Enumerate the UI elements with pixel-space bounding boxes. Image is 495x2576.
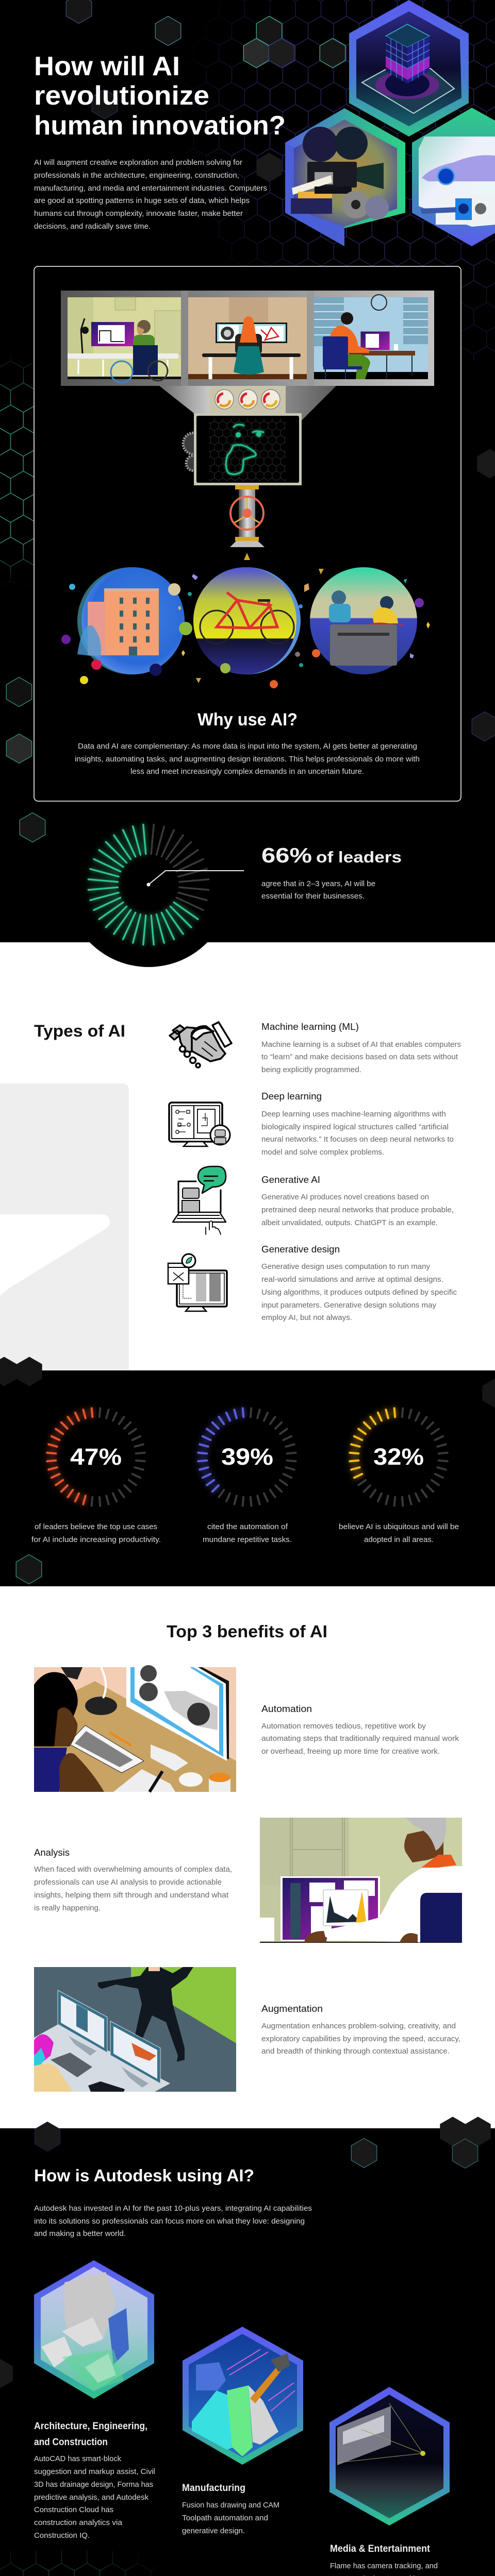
scene: bike designer [188, 297, 307, 379]
text: analysis [34, 1847, 232, 1912]
text: generative design: input parameters. Generative design solutions may [261, 1301, 437, 1310]
text: automation: automating steps that traditionally required manual work [261, 1735, 459, 1743]
gauge: 32 percent: 32% [373, 1444, 424, 1470]
text: automation: Automation removes tedious, repetitive work by [261, 1722, 426, 1731]
intro text: autodesk [34, 2205, 312, 2238]
text: architecture: predictive analysis, and Autodesk [34, 2494, 149, 2502]
text: manufacturing: Toolpath automation and [182, 2514, 268, 2522]
text: why use AI: Data and AI are complementary: As more data is input into the system, AI gets better at generating [78, 742, 417, 751]
scene: animator [314, 295, 428, 379]
hexagon: architecture [34, 2260, 154, 2399]
icon: deep learning monitor [169, 1103, 230, 1146]
intro text: decisions, and radically save time. [34, 223, 151, 231]
text: generative design: Generative design uses computation to run many [261, 1263, 431, 1271]
stat captions [31, 1523, 459, 1544]
text: deep learning: Deep learning [261, 1091, 322, 1101]
text: architecture: and Construction [34, 2437, 108, 2448]
intro text: autodesk: Autodesk has invested in AI for the past 10-plus years, integrating AI capabilities [34, 2205, 312, 2213]
icon: generative AI laptop [173, 1166, 226, 1234]
text: deep learning [261, 1091, 454, 1157]
text: augmentation: exploratory capabilities by improving the speed, accuracy, [261, 2035, 460, 2043]
text: generative AI: Generative AI produces novel creations based on [261, 1193, 429, 1201]
title: How will AI [34, 52, 180, 81]
intro text: manufacturing, and media and entertainment industries. Computers [34, 184, 267, 193]
text: manufacturing: Fusion has drawing and CAM [182, 2501, 279, 2510]
text: machine learning: being explicitly programmed. [261, 1066, 361, 1074]
text: architecture [34, 2421, 155, 2540]
text: automation: or overhead, freeing up more time for creative work. [261, 1748, 440, 1756]
text: architecture: suggestion and markup assist, Civil [34, 2468, 155, 2476]
text: why use AI [75, 742, 420, 776]
text: machine learning [261, 1021, 461, 1074]
text: architecture: AutoCAD has smart-block [34, 2455, 122, 2463]
text: analysis: Analysis [34, 1847, 70, 1858]
intro text: AI will augment creative exploration and problem solving for [34, 159, 242, 167]
intro text: autodesk: into its solutions so professionals can focus more on what they love: designing [34, 2217, 305, 2226]
stat captions: believe AI is ubiquitous and will be [339, 1523, 459, 1531]
panel: why use AI [34, 266, 461, 801]
illustration: augmentation [34, 1967, 236, 2092]
text: machine learning: to “learn” and make decisions based on data sets without [261, 1053, 458, 1061]
illustration: automation [34, 1665, 236, 1792]
machine: hopper and gauges [159, 386, 336, 420]
stat text: 66 percent of leaders: 66% [261, 843, 312, 867]
text: architecture: Architecture, Engineering, [34, 2421, 147, 2432]
text: augmentation: Augmentation [261, 2003, 323, 2014]
title: human innovation? [34, 111, 286, 141]
text: generative design: Using algorithms, it produces outputs defined by specific [261, 1289, 457, 1297]
text: analysis: insights, helping them sift through and understand what [34, 1891, 228, 1900]
gauge: 39 percent [198, 1408, 296, 1506]
text: why use AI: insights, automating tasks, and augmenting design iterations. This helps professionals do more with [75, 755, 420, 764]
text: generative design: real-world simulations and arrive at optimal designs. [261, 1276, 443, 1284]
text: deep learning: neural networks.” It focuses on deep neural networks to [261, 1136, 454, 1144]
stat captions: for AI include increasing productivity. [31, 1536, 161, 1544]
machine: thinking face monitor [194, 413, 302, 485]
machine: column with valve wheel [230, 485, 265, 560]
gauge: 47 percent [47, 1408, 145, 1506]
scene: architect in wheelchair [68, 297, 181, 383]
sphere: bicycle [193, 567, 301, 674]
text: automation: Automation [261, 1703, 312, 1714]
text: manufacturing [182, 2483, 279, 2535]
stat captions: mundane repetitive tasks. [203, 1536, 292, 1544]
text: media and entertainment: Media & Entertainment [330, 2544, 431, 2554]
title [34, 52, 286, 141]
text: generative AI [261, 1174, 454, 1227]
text: architecture: construction analytics via [34, 2519, 123, 2527]
text: generative AI: pretrained deep neural networks that produce probable, [261, 1206, 454, 1214]
sphere: gamers [310, 567, 417, 674]
heading: types of AI: Types of AI [34, 1022, 125, 1040]
text: analysis: When faced with overwhelming amounts of complex data, [34, 1866, 232, 1874]
hero hexagon: film camera [285, 108, 405, 246]
heading: top 3 benefits: Top 3 benefits of AI [167, 1622, 327, 1641]
text: automation [261, 1703, 459, 1756]
text: machine learning: Machine learning (ML) [261, 1021, 359, 1032]
text: why use AI: less and meet increasingly complex demands in an uncertain future. [130, 768, 364, 776]
intro text: are good at spotting patterns in huge sets of data, which helps [34, 197, 250, 205]
gauge: 39 percent: 39% [221, 1444, 273, 1470]
text: generative AI: albeit unvalidated, outputs. ChatGPT is an example. [261, 1219, 438, 1227]
icon: generative design [168, 1254, 227, 1311]
text: augmentation [261, 2003, 460, 2056]
section: autodesk dark background [0, 2116, 495, 2576]
text: media and entertainment [330, 2544, 445, 2576]
gauge: 47 percent: 47% [70, 1444, 122, 1470]
machine: workstation frame [61, 291, 434, 386]
hexagon: media and entertainment [329, 2387, 450, 2526]
sphere: building [77, 567, 185, 674]
hero hexagon: data tower [349, 0, 469, 137]
text: architecture: Construction IQ. [34, 2532, 90, 2540]
stat gauge: 66 percent [66, 802, 244, 967]
intro text: autodesk: and making a better world. [34, 2230, 126, 2238]
title: revolutionize [34, 81, 209, 111]
hero hexagon: car design [412, 108, 495, 246]
text: architecture: Construction Cloud has [34, 2506, 113, 2514]
text: deep learning: Deep learning uses machine-learning algorithms with [261, 1110, 446, 1118]
illustration: analysis [260, 1818, 462, 1942]
heading: how is autodesk using AI: How is Autodesk using AI? [34, 2166, 254, 2185]
icon: robot human handshake [170, 1022, 232, 1067]
intro text [34, 159, 267, 231]
text: deep learning: biologically inspired logical structures called “artificial [261, 1123, 449, 1131]
stat captions: of leaders believe the top use cases [35, 1523, 157, 1531]
stat text: 66 percent of leaders: agree that in 2–3 years, AI will be [261, 880, 375, 888]
confetti [61, 569, 430, 688]
text: generative design: Generative design [261, 1244, 340, 1255]
stat text: 66 percent of leaders [261, 843, 402, 901]
heading: why use AI: Why use AI? [197, 710, 298, 730]
section: stats band [0, 1357, 495, 1586]
gauge: 32 percent [350, 1408, 448, 1506]
text: manufacturing: generative design. [182, 2527, 245, 2535]
text: media and entertainment: Flame has camera tracking, and [330, 2562, 438, 2570]
hexagon: manufacturing [183, 2327, 303, 2465]
section: white background types [0, 942, 495, 1370]
text: manufacturing: Manufacturing [182, 2483, 245, 2494]
text: generative AI: Generative AI [261, 1174, 320, 1185]
text: machine learning: Machine learning is a subset of AI that enables computers [261, 1041, 461, 1049]
text: augmentation: and breadth of thinking through contextual assistance. [261, 2047, 450, 2056]
text: deep learning: model and solve complex problems. [261, 1148, 384, 1157]
text: analysis: is really happening. [34, 1904, 101, 1912]
text: analysis: professionals can use AI analysis to provide actionable [34, 1878, 222, 1887]
text: architecture: 3D has drainage design, Forma has [34, 2481, 153, 2489]
stat text: 66 percent of leaders: of leaders [316, 848, 402, 866]
text: generative design [261, 1244, 457, 1322]
stat captions: adopted in all areas. [364, 1536, 434, 1544]
text: generative design: employ AI, but not always. [261, 1314, 352, 1322]
stat text: 66 percent of leaders: essential for their businesses. [261, 892, 365, 901]
intro text: professionals in the architecture, engineering, construction, [34, 172, 239, 180]
section: hero dark background [0, 0, 495, 942]
machine: gears [183, 433, 205, 471]
text: augmentation: Augmentation enhances problem-solving, creativity, and [261, 2022, 456, 2030]
intro text: humans cut through complexity, innovate faster, make better [34, 210, 243, 218]
stat captions: cited the automation of [207, 1523, 288, 1531]
